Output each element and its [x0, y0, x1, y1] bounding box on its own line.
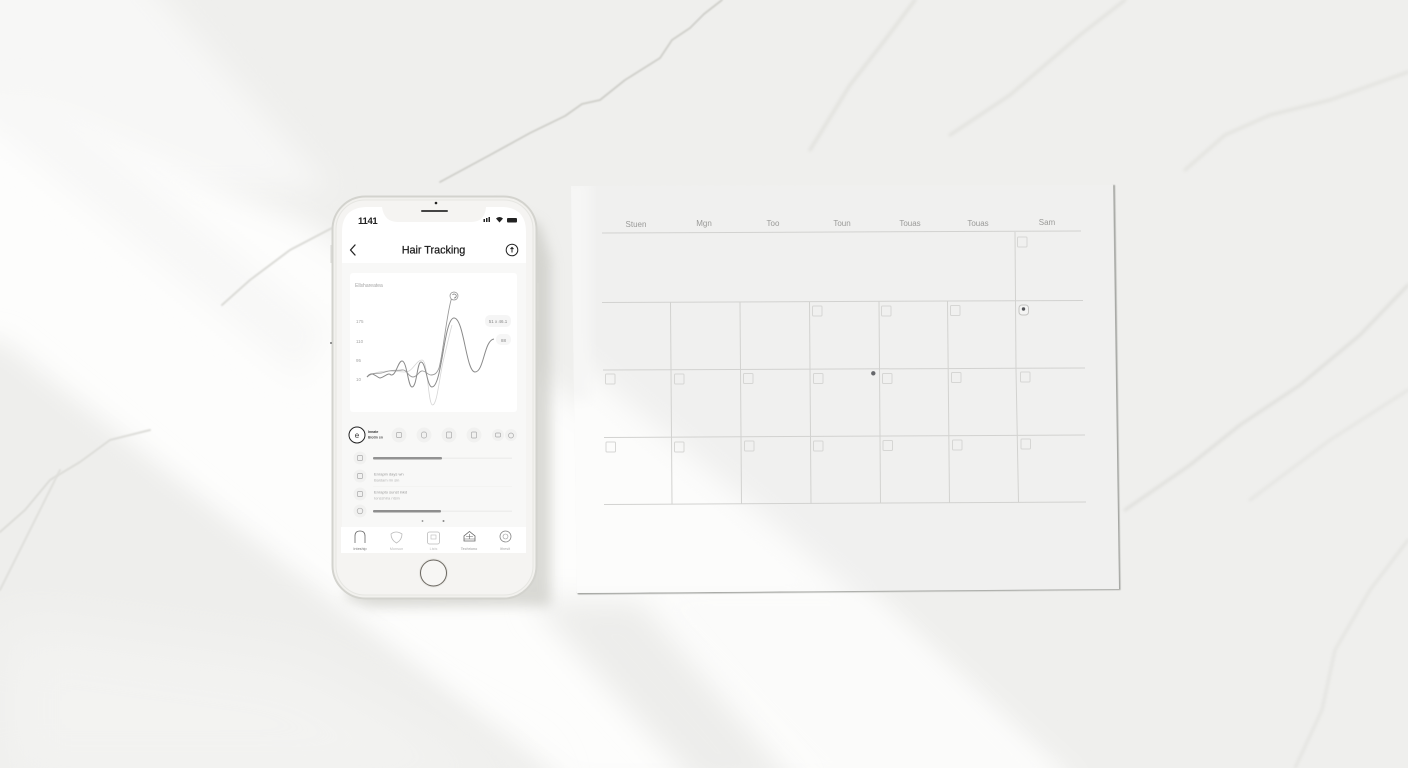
- weekday headings: [626, 218, 1056, 229]
- tab icon: add: Techriono: [461, 547, 477, 551]
- calendar sheet: [540, 180, 1120, 610]
- tab icon: box: Lists: [430, 547, 438, 551]
- calendar grid: [602, 231, 1086, 504]
- row three text: Ionsshira ntsin: [374, 496, 400, 500]
- day checkboxes: [606, 237, 1030, 452]
- tab icon: heart: Monsun: [390, 547, 403, 551]
- sheet edge shadow: [577, 185, 1120, 594]
- weekday headings: Too: [767, 219, 780, 228]
- phone: [330, 196, 551, 607]
- chart card: 10: [356, 377, 362, 382]
- app header: [350, 244, 518, 256]
- tab icon: home: [353, 531, 367, 551]
- marker dot: [871, 371, 876, 375]
- tab icon: heart: [390, 532, 403, 551]
- row two text: Enrapin days wn: [374, 472, 404, 476]
- phone shadow: [345, 205, 551, 607]
- tab icon: profile: Ithesit: [500, 547, 511, 551]
- selected category: e: [355, 431, 360, 440]
- light band: main diagonal: [0, 110, 1080, 768]
- chart card: Ellshareatea: [355, 283, 383, 289]
- status bar: [358, 216, 517, 227]
- value tag lower: [496, 334, 511, 345]
- tab icon: box: [428, 532, 440, 551]
- tab bar: [341, 527, 526, 553]
- main curve: [367, 318, 494, 387]
- speaker and camera: [421, 202, 448, 212]
- chart card: 95: [356, 358, 362, 363]
- row one slider: [354, 452, 512, 464]
- row three text: [354, 488, 407, 500]
- content background: [342, 263, 526, 527]
- weekday headings: Mgn: [696, 219, 712, 228]
- faint curve: [367, 325, 452, 405]
- weekday headings: Touas: [967, 219, 989, 228]
- selected category: Innate: [368, 430, 378, 434]
- tab icon: add: [461, 532, 477, 551]
- screen: [342, 207, 526, 553]
- row four slider: [354, 504, 512, 518]
- home button: [420, 559, 448, 587]
- chart card: 175: [356, 319, 364, 324]
- row two text: [354, 470, 512, 487]
- pager dots: [422, 520, 444, 522]
- selected category: Biotin sn: [368, 436, 383, 440]
- selected category: [349, 427, 383, 443]
- app header: Hair Tracking: [402, 244, 465, 256]
- phone body: [332, 196, 536, 598]
- weekday headings: Touas: [899, 219, 921, 228]
- category row: [349, 427, 517, 443]
- chart card: 110: [356, 339, 364, 344]
- marked day: [1019, 305, 1028, 315]
- upper curve: [367, 297, 452, 377]
- value tag upper: [485, 315, 511, 327]
- chart card: [350, 273, 517, 412]
- row three text: Enrapto sunst inkd: [374, 490, 407, 494]
- weekday headings: Toun: [833, 219, 851, 228]
- value tag upper: 51 x 46.1: [489, 319, 508, 324]
- row two text: Baidam rin sin: [374, 478, 399, 482]
- sheet surface: [571, 185, 1119, 593]
- peak marker: [450, 292, 458, 300]
- status bar: 1141: [358, 216, 378, 227]
- list rows: [354, 452, 512, 522]
- weekday headings: Sam: [1039, 218, 1056, 227]
- weekday headings: Stuen: [626, 220, 646, 229]
- tab icon: profile: [500, 531, 511, 551]
- tab icon: home: Inteship: [353, 547, 367, 551]
- value tag lower: 88: [501, 338, 506, 343]
